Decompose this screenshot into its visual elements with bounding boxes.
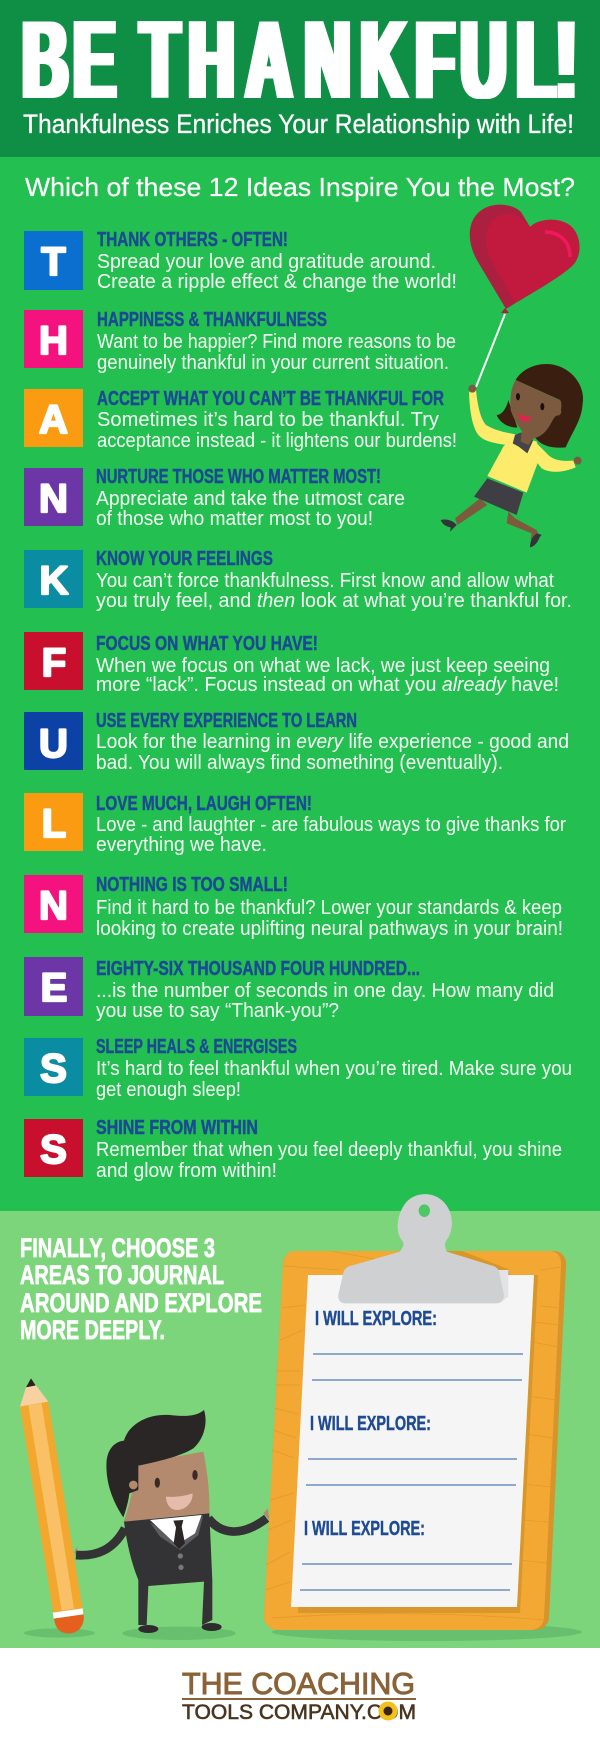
- icon: businessman: [74, 1410, 269, 1640]
- idea: E: you use to say “Thank-you”?: [96, 1000, 339, 1022]
- panel: twelve ideas: [0, 157, 600, 1211]
- logo: THE COACHING: [182, 1666, 415, 1701]
- idea: U: USE EVERY EXPERIENCE TO LEARN: [96, 710, 357, 732]
- idea: N: NOTHING IS TOO SMALL!: [96, 874, 288, 896]
- idea: E: [24, 957, 554, 1022]
- journal prompt 1: I WILL EXPLORE:: [315, 1308, 437, 1330]
- idea: E: EIGHTY-SIX THOUSAND FOUR HUNDRED...: [96, 958, 420, 980]
- logo: TOOLS COMPANY.COM: [182, 1701, 416, 1724]
- idea: N: [24, 466, 405, 530]
- idea: A: A: [39, 398, 68, 442]
- idea: U: [24, 710, 569, 774]
- idea: L: [24, 793, 566, 856]
- call to action text: AROUND AND EXPLORE: [20, 1288, 262, 1318]
- idea: T: Create a ripple effect & change the world!: [97, 271, 457, 293]
- idea: N: N: [39, 884, 68, 928]
- idea: S: Remember that when you feel deeply thankful, you shine: [96, 1139, 562, 1161]
- idea: N: Find it hard to be thankful? Lower your standards & keep: [96, 897, 562, 919]
- idea: H: HAPPINESS & THANKFULNESS: [97, 309, 327, 331]
- icon: sunflower: [378, 1702, 398, 1720]
- idea: K: You can’t force thankfulness. First know and allow what: [96, 570, 554, 592]
- idea: F: F: [42, 641, 66, 685]
- idea: N: [24, 874, 563, 940]
- idea: H: [24, 309, 456, 374]
- idea: K: [24, 548, 572, 612]
- idea: E: E: [41, 966, 67, 1010]
- idea: L: LOVE MUCH, LAUGH OFTEN!: [96, 793, 312, 815]
- icon: pencil: [20, 1378, 95, 1638]
- idea: N: N: [39, 477, 68, 521]
- icon: clipboard: [264, 1194, 582, 1641]
- journal prompt 2: I WILL EXPLORE:: [310, 1413, 431, 1435]
- idea: F: [24, 632, 559, 696]
- idea: S: S: [40, 1128, 67, 1172]
- idea: A: Sometimes it’s hard to be thankful. Try: [97, 409, 439, 431]
- idea: U: Look for the learning in every life experience - good and: [96, 731, 569, 753]
- idea: T: [24, 229, 457, 293]
- idea: T: THANK OTHERS - OFTEN!: [97, 229, 288, 251]
- idea: K: you truly feel, and then look at what you’re thankful for.: [96, 590, 572, 612]
- idea: A: acceptance instead - it lightens our burdens!: [97, 430, 457, 452]
- logo: [182, 1666, 416, 1724]
- idea: N: Appreciate and take the utmost care: [96, 488, 405, 510]
- idea: S: and glow from within!: [96, 1160, 277, 1182]
- idea: A: [24, 388, 457, 452]
- idea: S: S: [40, 1047, 67, 1091]
- idea: L: everything we have.: [96, 834, 267, 856]
- idea: K: K: [40, 559, 69, 603]
- call to action text: MORE DEEPLY.: [20, 1315, 165, 1345]
- idea: H: genuinely thankful in your current situation.: [97, 352, 449, 374]
- idea: U: bad. You will always find something (eventually).: [96, 752, 503, 774]
- idea: T: Spread your love and gratitude around.: [97, 251, 436, 273]
- idea: H: Want to be happier? Find more reasons to be: [97, 331, 456, 353]
- idea: N: of those who matter most to you!: [96, 508, 373, 530]
- icon: woman holding balloon: [441, 364, 583, 547]
- idea: S: get enough sleep!: [96, 1079, 241, 1101]
- idea: S: SLEEP HEALS & ENERGISES: [96, 1036, 297, 1058]
- journal prompt 3: I WILL EXPLORE:: [304, 1518, 425, 1540]
- idea: N: looking to create uplifting neural pathways in your brain!: [96, 918, 563, 940]
- idea: K: KNOW YOUR FEELINGS: [96, 548, 273, 570]
- idea: E: ...is the number of seconds in one day. How many did: [96, 980, 554, 1002]
- idea: F: When we focus on what we lack, we just keep seeing: [96, 655, 550, 677]
- idea: T: T: [41, 240, 66, 284]
- idea: L: Love - and laughter - are fabulous ways to give thanks for: [96, 814, 566, 836]
- idea: U: U: [39, 722, 68, 766]
- idea: F: more “lack”. Focus instead on what you already have!: [96, 674, 559, 696]
- idea: N: NURTURE THOSE WHO MATTER MOST!: [96, 466, 381, 488]
- section question: Which of these 12 Ideas Inspire You the Most?: [25, 172, 575, 202]
- call to action text: AREAS TO JOURNAL: [20, 1260, 224, 1290]
- title: BE THANKFUL!: [22, 0, 577, 123]
- clipboard clip: [338, 1194, 508, 1303]
- idea: F: FOCUS ON WHAT YOU HAVE!: [96, 633, 318, 655]
- idea: H: H: [39, 319, 68, 363]
- idea: L: L: [42, 802, 66, 846]
- panel: journal: [0, 1194, 600, 1648]
- idea: S: [24, 1036, 572, 1101]
- call to action text: FINALLY, CHOOSE 3: [20, 1233, 215, 1263]
- idea: S: SHINE FROM WITHIN: [96, 1117, 258, 1139]
- header band: [0, 0, 600, 157]
- idea: S: [24, 1117, 562, 1182]
- call to action text: [20, 1233, 262, 1345]
- idea: A: ACCEPT WHAT YOU CAN’T BE THANKFUL FOR: [97, 388, 444, 410]
- icon: heart balloon: [470, 205, 579, 387]
- idea: S: It’s hard to feel thankful when you’re tired. Make sure you: [96, 1058, 572, 1080]
